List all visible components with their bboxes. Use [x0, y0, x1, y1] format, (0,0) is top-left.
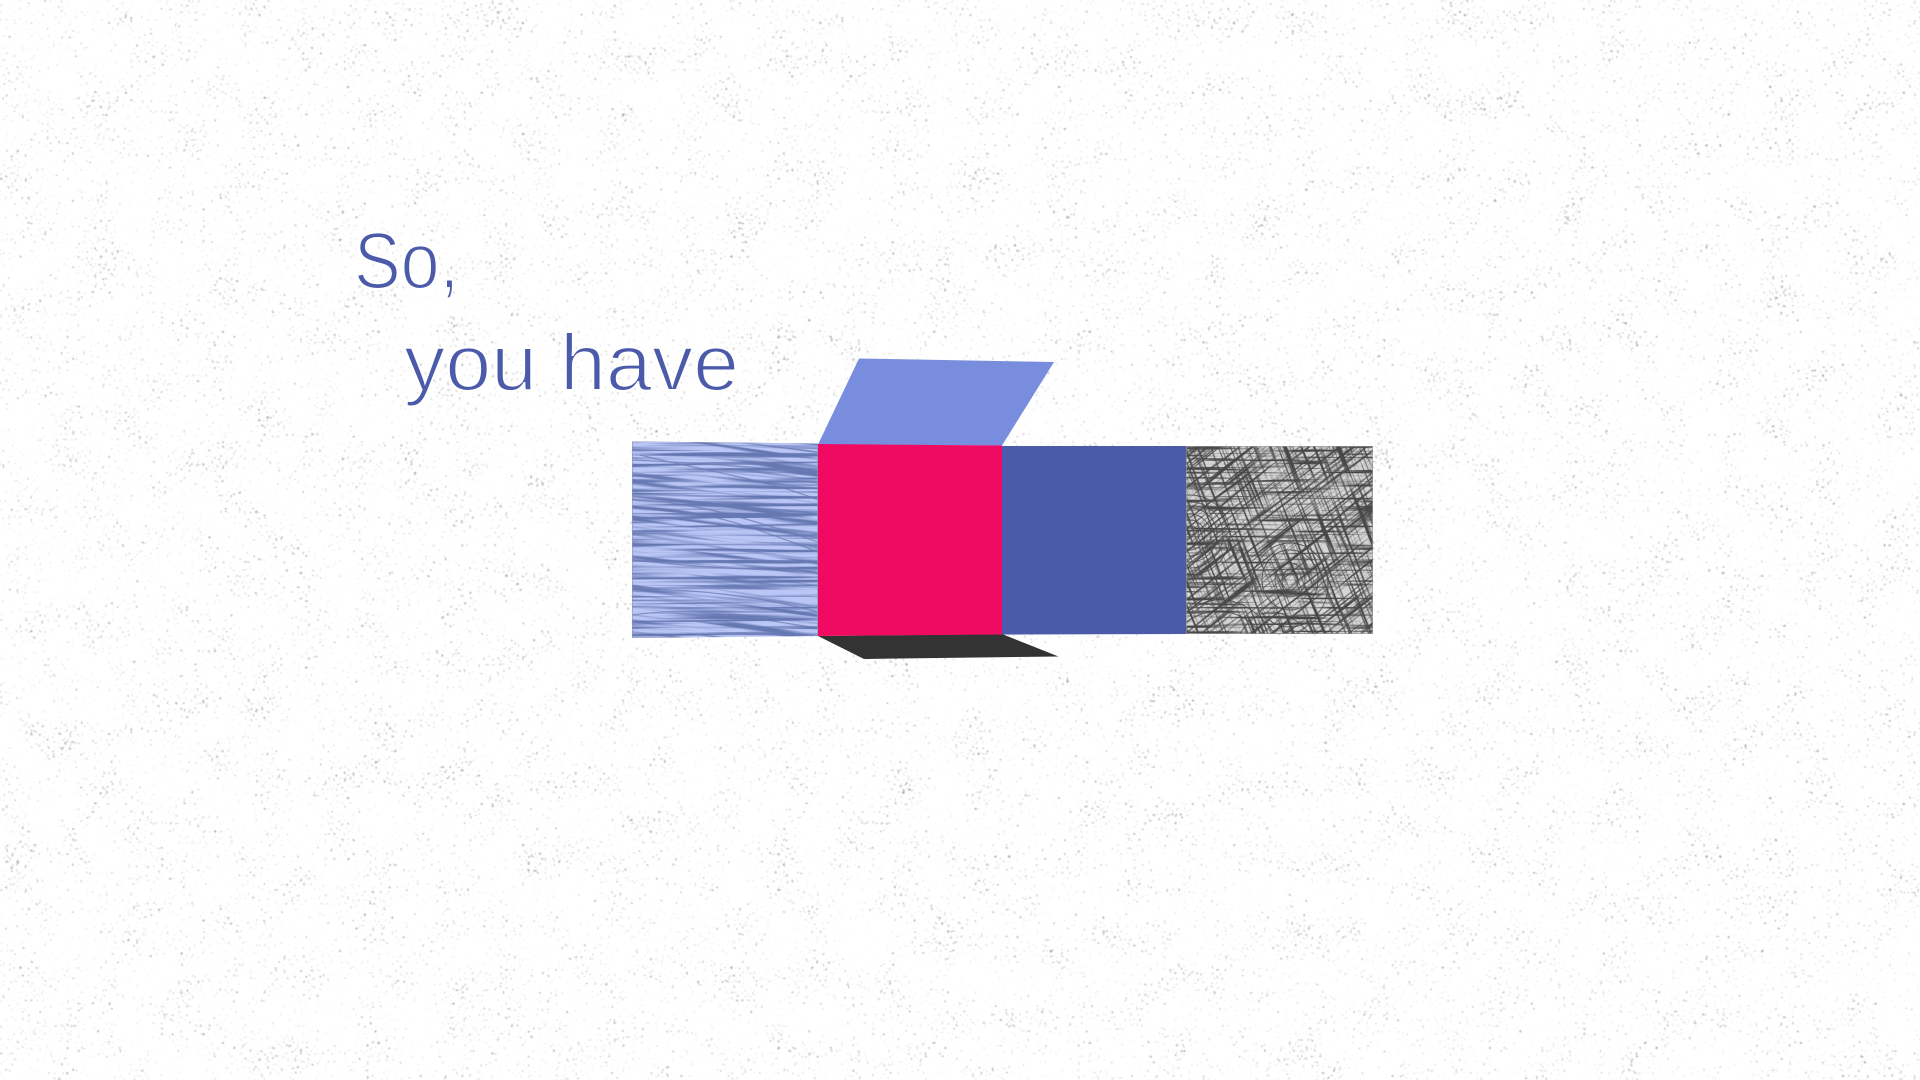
- title text: So, you have: So,: [354, 216, 459, 305]
- panel: grey scribbled right face: [1186, 446, 1373, 634]
- panel: indigo face: [1002, 446, 1186, 634]
- diagram: unfolded cube net: [632, 358, 1373, 659]
- title text: So, you have: [354, 216, 739, 407]
- title text: So, you have: you have: [404, 318, 739, 407]
- panel: periwinkle top flap: [818, 358, 1054, 446]
- panel: dark shadow flap: [818, 634, 1058, 659]
- panel: crimson front face: [818, 444, 1002, 636]
- panel: blue hatched left face: [632, 442, 818, 638]
